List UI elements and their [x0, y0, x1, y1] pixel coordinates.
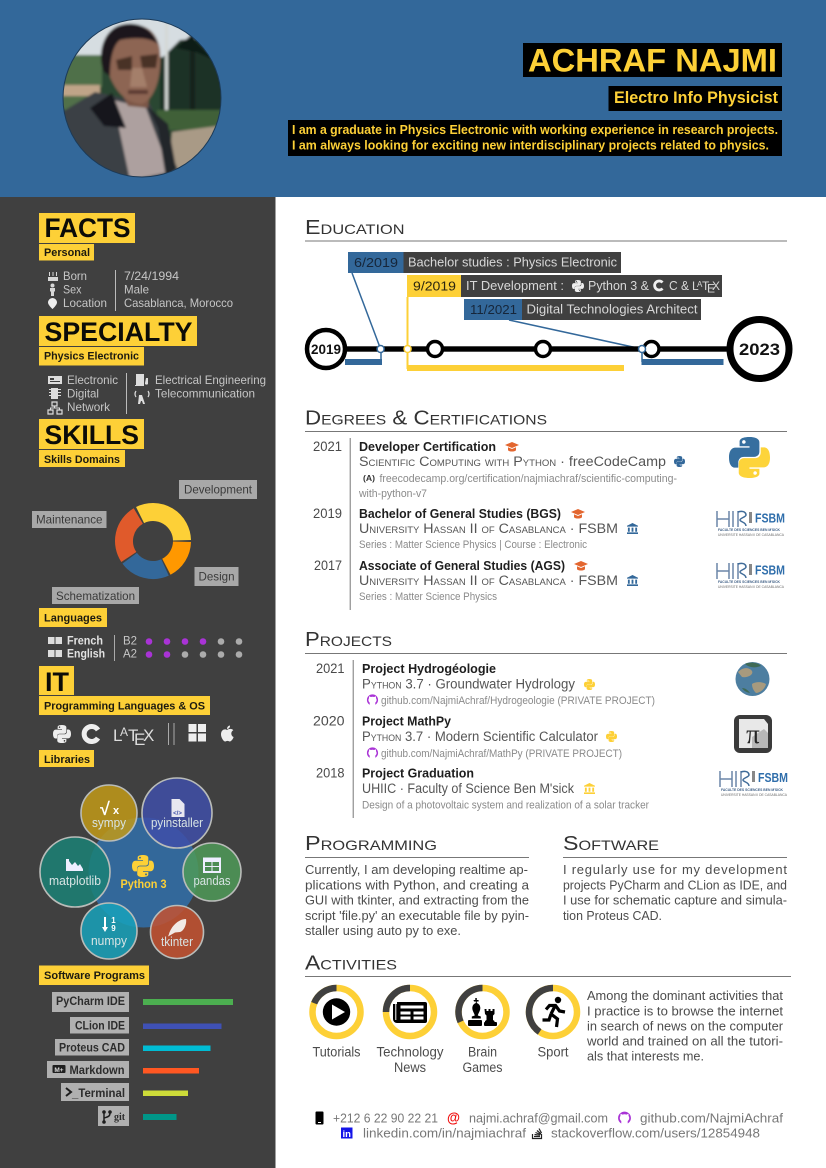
- subheading: software programs: [39, 966, 149, 985]
- name box: ACHRAF NAJMI: [528, 43, 777, 79]
- LaTeX wordmark: L: [113, 726, 122, 745]
- bubble: pandas: [183, 843, 241, 901]
- project: graduation: UHIIC · Faculty of Science Ben M'sick: [362, 781, 574, 796]
- icon: apple: [221, 726, 234, 742]
- LaTeX wordmark small: L: [692, 279, 699, 293]
- bubble: tkinter: tkinter: [161, 934, 194, 949]
- degree: bachelor: University Hassan II of Casablanca · FSBM: [359, 521, 618, 536]
- timeline milestones: [428, 342, 442, 356]
- subheading: programming languages and OS: Programming Languages & OS: [44, 700, 205, 712]
- hub: python 3: [88, 818, 198, 928]
- projects list: [313, 660, 788, 818]
- bubble: tkinter: [150, 906, 204, 958]
- project: mathpy: Python 3.7 · Modern Scientific Calculator: [362, 729, 598, 744]
- LaTeX wordmark: E: [134, 730, 145, 749]
- specialty list: Digital: [67, 386, 99, 400]
- icon: electric station: [135, 374, 148, 386]
- icon: chip: [51, 388, 58, 399]
- degree: bachelor: Series : Matter Science Physics | Course : Electronic: [359, 539, 587, 551]
- heading: IT: IT: [45, 667, 70, 697]
- activity: brain games: [458, 988, 506, 1075]
- subheading: skills domains: Skills Domains: [44, 454, 120, 466]
- contact details: +212 6 22 90 22 21: [333, 1110, 438, 1126]
- text block: software: I regularly use for my development: [563, 862, 787, 877]
- activity: technology news: [376, 988, 444, 1075]
- project: hydrogeologie: Project Hydrogéologie: [362, 662, 496, 676]
- bubble: pyinstaller: [142, 778, 212, 848]
- header band: [0, 0, 826, 197]
- icon: python: [53, 725, 71, 743]
- icon: electronic board: [48, 376, 62, 384]
- icon: chess rook: [484, 1009, 494, 1022]
- logo: FSBM: [717, 510, 785, 537]
- event: IT development: 9/2019: [413, 278, 456, 294]
- project: graduation: Project Graduation: [362, 766, 474, 780]
- LaTeX wordmark small: T: [702, 279, 710, 293]
- bar row: markdown: [47, 1061, 199, 1078]
- project: mathpy: 2020: [313, 714, 344, 728]
- degree: developer certification: Scientific Computing with Python · freeCodeCamp: [359, 454, 666, 469]
- icon: github: [618, 1112, 631, 1123]
- activity: sport: Sport: [538, 1044, 569, 1060]
- start node 2019: 2019: [311, 342, 341, 357]
- end node 2023: [730, 320, 789, 378]
- bar row: markdown: Markdown: [70, 1065, 124, 1077]
- logo: FSBM: FSBM: [758, 770, 788, 785]
- bubble: sympy: √: [100, 799, 110, 819]
- facts labels: Born: [63, 269, 87, 283]
- subheading: personal: [39, 244, 94, 260]
- icon: python small: [572, 280, 584, 292]
- text block: programming: [305, 862, 530, 938]
- degree: developer certification: Developer Certification: [359, 440, 496, 454]
- donut label: design: Design: [198, 570, 234, 584]
- icon: language: [48, 637, 62, 657]
- event: IT development: [407, 275, 722, 297]
- icon: stack overflow: [532, 1128, 542, 1138]
- personal facts list: Location: [63, 296, 107, 310]
- text block: software: I use for schematic capture and simula-: [563, 892, 787, 908]
- icon: phone: [316, 1112, 324, 1124]
- activity: tutorials: Tutorials: [312, 1044, 361, 1060]
- heading: facts: FACTS: [44, 213, 130, 243]
- biography box: I am a graduate in Physics Electronic with working experience in research projects.: [292, 123, 778, 137]
- icon: antenna: [138, 395, 145, 404]
- donut label: schematization: Schematization: [56, 589, 135, 603]
- icon: pi calculator: π: [746, 719, 760, 749]
- text block: activities: in search of news on the computer: [587, 1018, 784, 1034]
- icon: map pin: [48, 298, 57, 309]
- programming and OS icons: [53, 723, 234, 749]
- specialty list: Electronic: [67, 373, 118, 387]
- subheading: libraries: Libraries: [44, 754, 90, 766]
- contact details: stackoverflow.com/users/12854948: [551, 1126, 760, 1140]
- subheading: personal: Personal: [44, 247, 90, 259]
- education timeline: [307, 252, 789, 378]
- logo: FSBM: FSBM: [755, 562, 785, 578]
- specialty list: [48, 373, 266, 414]
- bubble: sympy: x: [113, 805, 120, 817]
- text block: programming: plications with Python, and creating a: [305, 878, 530, 892]
- activity: sport: [529, 988, 577, 1060]
- logo: FSBM: [717, 562, 785, 589]
- languages skill rows: [48, 634, 242, 661]
- contact details: github.com/NajmiAchraf: [640, 1110, 783, 1126]
- proficiency dots: [146, 638, 206, 658]
- logo: FSBM: FACULTE DES SCIENCES BEN M'SICK: [721, 788, 783, 792]
- bubble: numpy: [81, 903, 137, 959]
- subheading: physics electronic: Physics Electronic: [44, 350, 139, 362]
- logo: FSBM: FSBM: [755, 510, 785, 526]
- degree: associate: University Hassan II of Casablanca · FSBM: [359, 573, 618, 588]
- bar row: proteus cad: [55, 1039, 210, 1056]
- project: mathpy: github.com/NajmiAchraf/MathPy (PRIVATE PROJECT): [381, 748, 622, 760]
- logo: FSBM: UNIVERSITE HASSAN II DE CASABLANCA: [718, 585, 784, 589]
- heading: degrees and certifications: Degrees & Certifications: [305, 408, 547, 430]
- activity: technology news: Technology: [376, 1044, 444, 1060]
- personal facts list: Casablanca, Morocco: [124, 296, 233, 310]
- bubble: pandas: pandas: [194, 873, 231, 888]
- specialty list: Electrical Engineering: [155, 373, 266, 387]
- logo: FSBM: FACULTE DES SCIENCES BEN M'SICK: [718, 528, 780, 532]
- personal facts list: Sex: [63, 282, 82, 296]
- timeline main line: [340, 346, 735, 352]
- timeline connectors: [352, 273, 381, 349]
- text block: software: [563, 862, 787, 923]
- bubble: pyinstaller: </>: [173, 811, 182, 817]
- subheading: skills domains: [39, 450, 125, 467]
- contact details: najmi.achraf@gmail.com: [469, 1110, 608, 1126]
- end node 2023: 2023: [739, 340, 780, 359]
- text block: activities: world and trained on all the tutori-: [586, 1034, 783, 1048]
- degree: bachelor: 2019: [313, 506, 342, 521]
- heading: software: Software: [563, 833, 659, 855]
- bar row: pycharm: PyCharm IDE: [56, 996, 125, 1008]
- text block: programming: script 'file.py' an executable file by pyin-: [305, 908, 529, 923]
- text block: activities: [586, 988, 784, 1064]
- degree: developer certification: with-python-v7: [358, 488, 427, 500]
- event: digital technologies architect: Digital Technologies Architect: [526, 302, 698, 316]
- activity: brain games: Brain: [468, 1044, 497, 1060]
- donut label: design: [194, 567, 238, 586]
- bar row: markdown: M+: [54, 1067, 64, 1074]
- activity: technology news: News: [394, 1060, 426, 1075]
- facts values: 7/24/1994: [124, 269, 179, 283]
- languages skill rows: A2: [123, 646, 137, 660]
- subheading: software programs: Software Programs: [44, 970, 145, 982]
- image: earth: [736, 662, 770, 696]
- text block: programming: staller using auto py to exe.: [305, 923, 461, 938]
- subheading: physics electronic: [39, 347, 144, 366]
- activity: brain games: Games: [462, 1060, 503, 1075]
- icon: runner: [555, 997, 561, 1003]
- degree: bachelor: [313, 506, 785, 551]
- text block: software: projects PyCharm and CLion as IDE, and: [563, 878, 787, 892]
- LaTeX wordmark: X: [143, 726, 154, 745]
- degree: associate: Associate of General Studies (AGS): [359, 559, 565, 573]
- icon: pi calculator: [734, 715, 772, 753]
- project: hydrogeologie: Python 3.7 · Groundwater Hydrology: [362, 676, 575, 692]
- bubble: matplotlib: matplotlib: [49, 873, 101, 888]
- bar row: pycharm: [52, 992, 233, 1012]
- text block: programming: GUI with tkinter, and extracting from the: [305, 892, 529, 908]
- project: mathpy: Project MathPy: [362, 714, 451, 728]
- specialty list: Network: [67, 400, 111, 414]
- event: bachelor studies: 6/2019: [354, 255, 398, 270]
- libraries bubble diagram: [40, 778, 241, 959]
- icon: C small: [655, 281, 662, 290]
- text block: programming: Currently, I am developing realtime ap-: [305, 862, 528, 877]
- left dark sidebar: [0, 197, 276, 1168]
- heading: IT: [39, 666, 74, 697]
- icon: C language: [84, 726, 98, 742]
- donut chart: skills domains: [124, 512, 182, 570]
- software bar chart: [47, 992, 233, 1126]
- heading: education: Education: [305, 217, 404, 239]
- hub: python 3: Python 3: [120, 877, 167, 891]
- degree: bachelor: Bachelor of General Studies (BGS): [359, 507, 561, 521]
- project: hydrogeologie: [316, 661, 770, 707]
- event: IT development: C &: [669, 278, 689, 293]
- bar row: clion: [70, 1017, 222, 1034]
- icon: birthday cake: [48, 272, 58, 281]
- degree: developer certification: [313, 437, 770, 500]
- bubble: numpy: 9: [111, 924, 116, 933]
- bar row: terminal: _Terminal: [71, 1088, 125, 1100]
- bubble: sympy: [81, 785, 137, 841]
- subheading: programming languages and OS: [39, 696, 210, 715]
- text block: activities: als that interests me.: [587, 1048, 704, 1064]
- degree: associate: [314, 558, 785, 603]
- donut label: development: Development: [184, 482, 253, 496]
- degree: associate: Series : Matter Science Physics: [359, 591, 497, 603]
- start node 2019: [307, 330, 345, 368]
- LaTeX wordmark small: E: [707, 282, 715, 296]
- heading: projects: Projects: [305, 629, 392, 651]
- contact details: in: [342, 1129, 351, 1140]
- text block: activities: Among the dominant activities that: [587, 988, 783, 1003]
- biography box: I am always looking for exciting new interdisciplinary projects related to physics.: [292, 138, 769, 152]
- LaTeX wordmark small: A: [697, 280, 703, 289]
- project: hydrogeologie: github.com/NajmiAchraf/Hydrogeologie (PRIVATE PROJECT): [381, 695, 655, 707]
- heading: skills: SKILLS: [44, 420, 139, 450]
- icon: at sign: @: [447, 1110, 460, 1126]
- languages skill rows: French: [67, 636, 103, 648]
- bubble: matplotlib: [40, 837, 110, 907]
- event: digital technologies architect: [464, 299, 701, 320]
- profile photo: [60, 15, 225, 180]
- icon: linkedin: [341, 1128, 352, 1138]
- bubble: pyinstaller: pyinstaller: [151, 815, 204, 830]
- languages skill rows: English: [67, 648, 105, 660]
- bubble: numpy: numpy: [91, 933, 127, 948]
- logo: FSBM: FACULTE DES SCIENCES BEN M'SICK: [718, 580, 780, 584]
- logo: python: [729, 437, 770, 478]
- project: graduation: 2018: [316, 766, 344, 780]
- icon: person: [50, 284, 55, 296]
- personal facts list: Male: [124, 282, 149, 296]
- photo outline: [63, 19, 221, 177]
- logo: FSBM: UNIVERSITE HASSAN II DE CASABLANCA: [721, 793, 787, 797]
- degree: developer certification: (A): [363, 473, 375, 483]
- heading: specialty: SPECIALTY: [44, 317, 192, 347]
- contact details: [316, 1110, 783, 1140]
- icon: windows: [188, 724, 206, 742]
- degree: associate: 2017: [314, 558, 342, 573]
- contact details: linkedin.com/in/najmiachraf: [363, 1126, 526, 1140]
- event: IT development: Python 3 &: [588, 278, 649, 293]
- bubble: numpy: 1: [111, 916, 116, 925]
- bar row: terminal: [61, 1083, 188, 1101]
- logo: FSBM: [720, 770, 788, 797]
- LaTeX wordmark: A: [120, 725, 128, 739]
- subheading: libraries: [39, 750, 94, 767]
- bar row: git: [98, 1106, 176, 1126]
- personal facts list: [48, 269, 233, 311]
- subheading: languages: [39, 608, 107, 627]
- LaTeX wordmark small: X: [712, 279, 720, 293]
- icon: network: [48, 402, 62, 414]
- text block: software: tion Proteus CAD.: [563, 908, 662, 923]
- donut label: maintenance: Maintenance: [36, 512, 103, 526]
- languages skill rows: B2: [123, 634, 137, 648]
- project: hydrogeologie: 2021: [316, 661, 344, 676]
- specialty list: Telecommunication: [155, 386, 255, 400]
- event: digital technologies architect: 11/2021: [470, 302, 517, 317]
- donut label: development: [179, 480, 257, 499]
- degree: developer certification: freecodecamp.org/certification/najmiachraf/scientific-computing-: [380, 473, 677, 485]
- bar row: proteus cad: Proteus CAD: [59, 1042, 125, 1054]
- activity: tutorials: [312, 988, 361, 1060]
- LaTeX wordmark: T: [128, 726, 138, 745]
- project: mathpy: [313, 714, 772, 760]
- biography box: [288, 120, 782, 156]
- bubble: sympy: sympy: [92, 815, 126, 830]
- event: bachelor studies: [348, 252, 621, 273]
- project: graduation: [316, 766, 788, 812]
- subheading: languages: Languages: [44, 612, 102, 624]
- icon: chess king: [472, 998, 481, 1018]
- logo: FSBM: UNIVERSITE HASSAN II DE CASABLANCA: [718, 533, 784, 537]
- bar row: git: git: [114, 1112, 125, 1123]
- event: IT development: IT Development :: [466, 278, 564, 293]
- project: graduation: Design of a photovoltaic system and realization of a solar tracker: [362, 800, 649, 812]
- degrees list: [313, 437, 785, 610]
- heading: activities: Activities: [305, 952, 397, 974]
- job title box: Electro Info Physicist: [614, 88, 778, 107]
- bar row: clion: CLion IDE: [75, 1020, 125, 1032]
- event: bachelor studies: Bachelor studies : Physics Electronic: [408, 254, 617, 270]
- heading: programming: Programming: [305, 833, 437, 855]
- degree: developer certification: 2021: [313, 439, 342, 454]
- text block: activities: I practice is to browse the internet: [587, 1004, 783, 1018]
